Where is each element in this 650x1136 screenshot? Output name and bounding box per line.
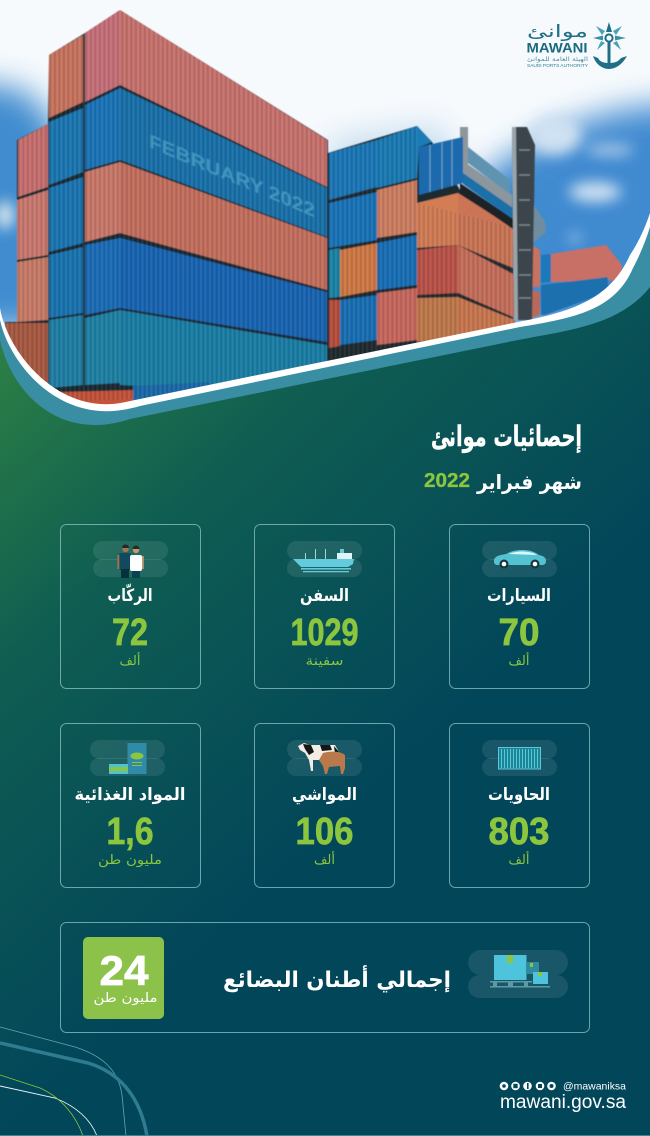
number: 1029 xyxy=(290,612,358,654)
right stack column A xyxy=(329,140,377,200)
rib texture: right stack xyxy=(329,126,515,365)
crane mast xyxy=(512,127,535,320)
label: الحاويات xyxy=(488,785,550,805)
number: 1,6 xyxy=(106,811,154,853)
handle: @mawaniksa xyxy=(563,1080,626,1092)
title: إحصائيات موانئ xyxy=(431,420,582,454)
logo latin subtitle: SAUDI PORTS AUTHORITY xyxy=(527,63,588,68)
panel: food xyxy=(60,724,200,888)
label: الركّاب xyxy=(108,583,152,606)
unit: ألف xyxy=(120,652,140,669)
spreader and lifted blue container xyxy=(419,127,546,244)
logo arabic wordmark: موانئ xyxy=(527,22,588,42)
number: 24 xyxy=(100,947,149,994)
number: 72 xyxy=(112,612,148,654)
heading: إجمالي أطنان البضائع xyxy=(223,964,451,993)
panel: livestock xyxy=(254,724,394,888)
panel: passengers xyxy=(60,524,200,688)
unit: مليون طن xyxy=(94,991,158,1006)
unit: ألف xyxy=(314,851,335,868)
right stack shadow silhouette xyxy=(328,126,515,365)
label: المواد الغذائية xyxy=(74,785,186,805)
panel: total cargo xyxy=(60,922,590,1032)
rib texture: left stack xyxy=(5,10,327,405)
container stacks xyxy=(5,10,622,405)
text on container: FEBRUARY 2022 xyxy=(149,131,315,222)
icon: container xyxy=(482,740,557,776)
right stack column B xyxy=(377,126,432,188)
label: السيارات xyxy=(487,586,551,606)
number: 70 xyxy=(498,612,540,654)
icon: car xyxy=(482,541,557,577)
social icons xyxy=(500,1082,556,1090)
unit: سفينة xyxy=(306,654,344,669)
photo: sky and stacked containers xyxy=(0,0,650,420)
left stack shadow silhouette xyxy=(5,10,328,405)
far right containers xyxy=(541,254,551,283)
number: 106 xyxy=(296,811,354,853)
label: السفن xyxy=(300,586,349,606)
right stack column C xyxy=(417,193,458,248)
panel: cars xyxy=(450,524,590,688)
label: المواشي xyxy=(292,785,357,805)
total value box xyxy=(83,937,164,1019)
sky xyxy=(0,0,650,420)
unit: ألف xyxy=(508,851,530,868)
unit: ألف xyxy=(508,652,530,669)
logo: Mawani xyxy=(526,22,627,69)
unit: مليون طن xyxy=(98,853,162,868)
website: mawani.gov.sa xyxy=(500,1092,626,1113)
decorative corner lines xyxy=(0,1027,650,1136)
icon: food packages xyxy=(90,740,165,776)
icon: ship xyxy=(287,541,362,577)
logo latin wordmark: MAWANI xyxy=(526,40,588,56)
subtitle: month: شهر فبراير xyxy=(476,470,582,494)
footer: social handle and website xyxy=(500,1080,626,1113)
gradient background xyxy=(0,287,650,1136)
far left column xyxy=(18,124,48,197)
logo anchor mark xyxy=(593,22,627,69)
second column xyxy=(49,35,83,118)
icon: boxes on pallets xyxy=(468,950,568,998)
number: 803 xyxy=(488,811,550,853)
logo arabic subtitle: الهيئة العامة للموانئ xyxy=(527,56,588,63)
icon: people xyxy=(93,541,168,578)
panel: containers xyxy=(450,724,590,888)
subtitle: year: 2022 xyxy=(424,470,470,492)
main stack long sides xyxy=(120,10,327,187)
icon: cow and sheep xyxy=(287,740,362,776)
panel: ships xyxy=(254,524,394,688)
main stack door faces xyxy=(85,10,120,102)
